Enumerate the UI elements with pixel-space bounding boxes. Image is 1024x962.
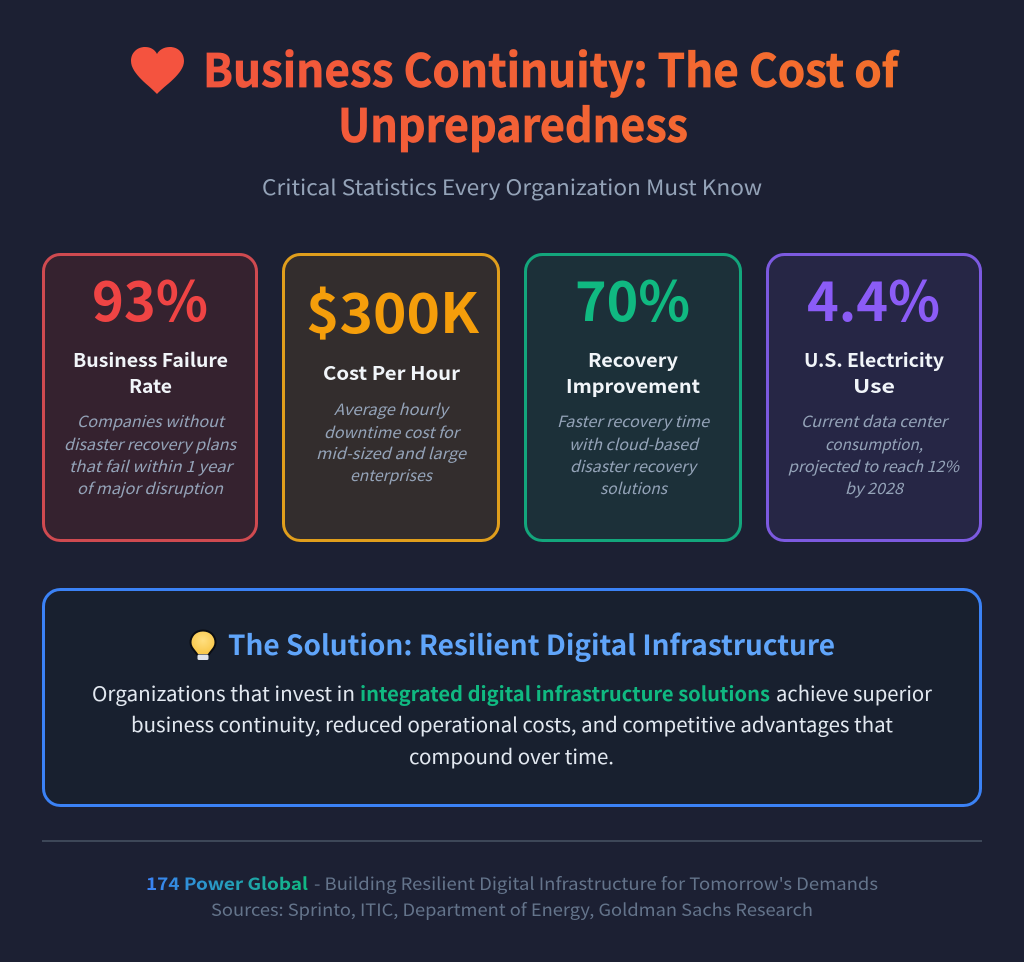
card description: mid-sized and large [316,442,467,464]
solution heading: The Solution: Resilient Digital Infrastructure [228,623,835,663]
footer [146,870,878,921]
panel: the solution [44,590,980,806]
brand name: 174 Power Global [146,870,308,895]
title: Unpreparedness [338,90,688,156]
card description: Faster recovery time [557,410,710,432]
card heading: Rate [129,372,172,399]
card heading: Use [853,372,895,399]
card description: downtime cost for [324,421,462,443]
panel: cost per hour [284,254,498,540]
solution body text: integrated digital infrastructure solutions [360,678,770,707]
card description: Companies without [77,410,226,432]
card description: with cloud-based [569,433,700,455]
card heading [73,346,228,399]
title: Business Continuity: The Cost of [203,35,900,101]
card heading: Recovery [588,346,678,373]
card description: disaster recovery [570,455,698,477]
stat: $300K: $300K [306,269,479,349]
card description: by 2028 [845,477,904,499]
card description: enterprises [350,464,434,486]
card description: that fail within 1 year [69,455,235,477]
icon: light bulb [190,630,216,660]
footer tagline: - Building Resilient Digital Infrastructure for Tomorrow's Demands [314,870,878,895]
card heading: Improvement [566,372,700,399]
solution body text: business continuity, reduced operational costs, and competitive advantages that [131,709,893,738]
card heading [804,346,944,399]
card description: of major disruption [77,477,225,499]
card description: solutions [600,477,669,499]
card heading: Business Failure [73,346,228,373]
subtitle: Critical Statistics Every Organization Must Know [262,172,762,202]
panel: U.S. electricity use [768,254,980,540]
card description: disaster recovery plans [64,433,238,455]
title [203,35,900,156]
solution body text: compound over time. [409,741,614,770]
solution body text: Organizations that invest in [92,678,355,707]
solution body text [92,678,932,770]
solution body text: achieve superior [776,678,932,707]
card heading: Cost Per Hour [323,359,461,386]
panel: business failure rate [44,254,256,540]
card heading [566,346,700,399]
card heading: U.S. Electricity [804,346,944,373]
card description: consumption, [825,433,923,455]
footer sources: Sources: Sprinto, ITIC, Department of Energy, Goldman Sachs Research [211,896,813,921]
card description [64,410,238,499]
card description: Average hourly [334,398,450,420]
card description [557,410,710,499]
stat: 70%: 70% [575,257,690,337]
card description: projected to reach 12% [788,455,961,477]
card description: Current data center [801,410,950,432]
card description [316,398,467,486]
icon: heart [131,47,184,94]
header [131,35,900,202]
stat: 4.4%: 4.4% [807,257,940,337]
card description [788,410,961,499]
panel: recovery improvement [526,254,740,540]
stat: 93%: 93% [92,257,208,337]
